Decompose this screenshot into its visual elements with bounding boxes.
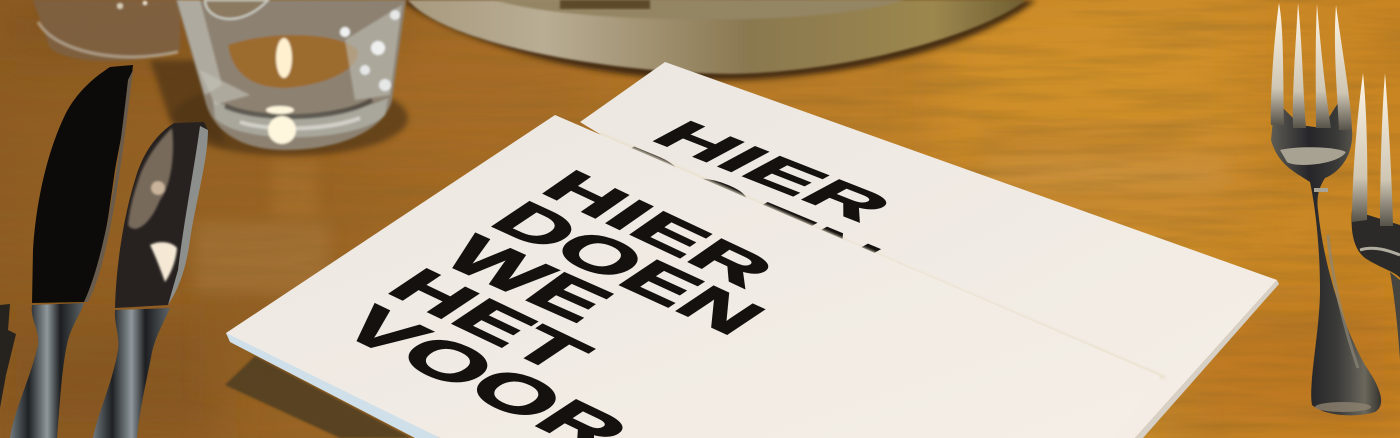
front menu booklet: [226, 115, 1160, 438]
heading line: HET: HET: [372, 259, 606, 382]
second fork, partly cropped: [1352, 73, 1400, 360]
heading on back booklet: DOEN (partly hidden): DOEN: [578, 138, 897, 280]
heading on back booklet: HIER: HIER: [636, 113, 909, 229]
metal serving tray: [400, 0, 1036, 80]
heading line: WE: WE: [426, 225, 629, 332]
napkin corner: [0, 304, 16, 408]
front booklet crease shading: [600, 134, 1165, 378]
background drinking glass: [33, 0, 180, 61]
drinking glass: [176, 0, 406, 150]
dark table knife: [10, 65, 133, 438]
back menu booklet: [578, 62, 1279, 438]
large fork: [1271, 3, 1381, 415]
paper booklet shadow: [225, 356, 412, 438]
shiny butter knife: [93, 122, 208, 438]
glass shadow: [150, 60, 408, 156]
heading line: DOEN: DOEN: [475, 192, 781, 345]
heading line: HIER: HIER: [528, 161, 789, 296]
